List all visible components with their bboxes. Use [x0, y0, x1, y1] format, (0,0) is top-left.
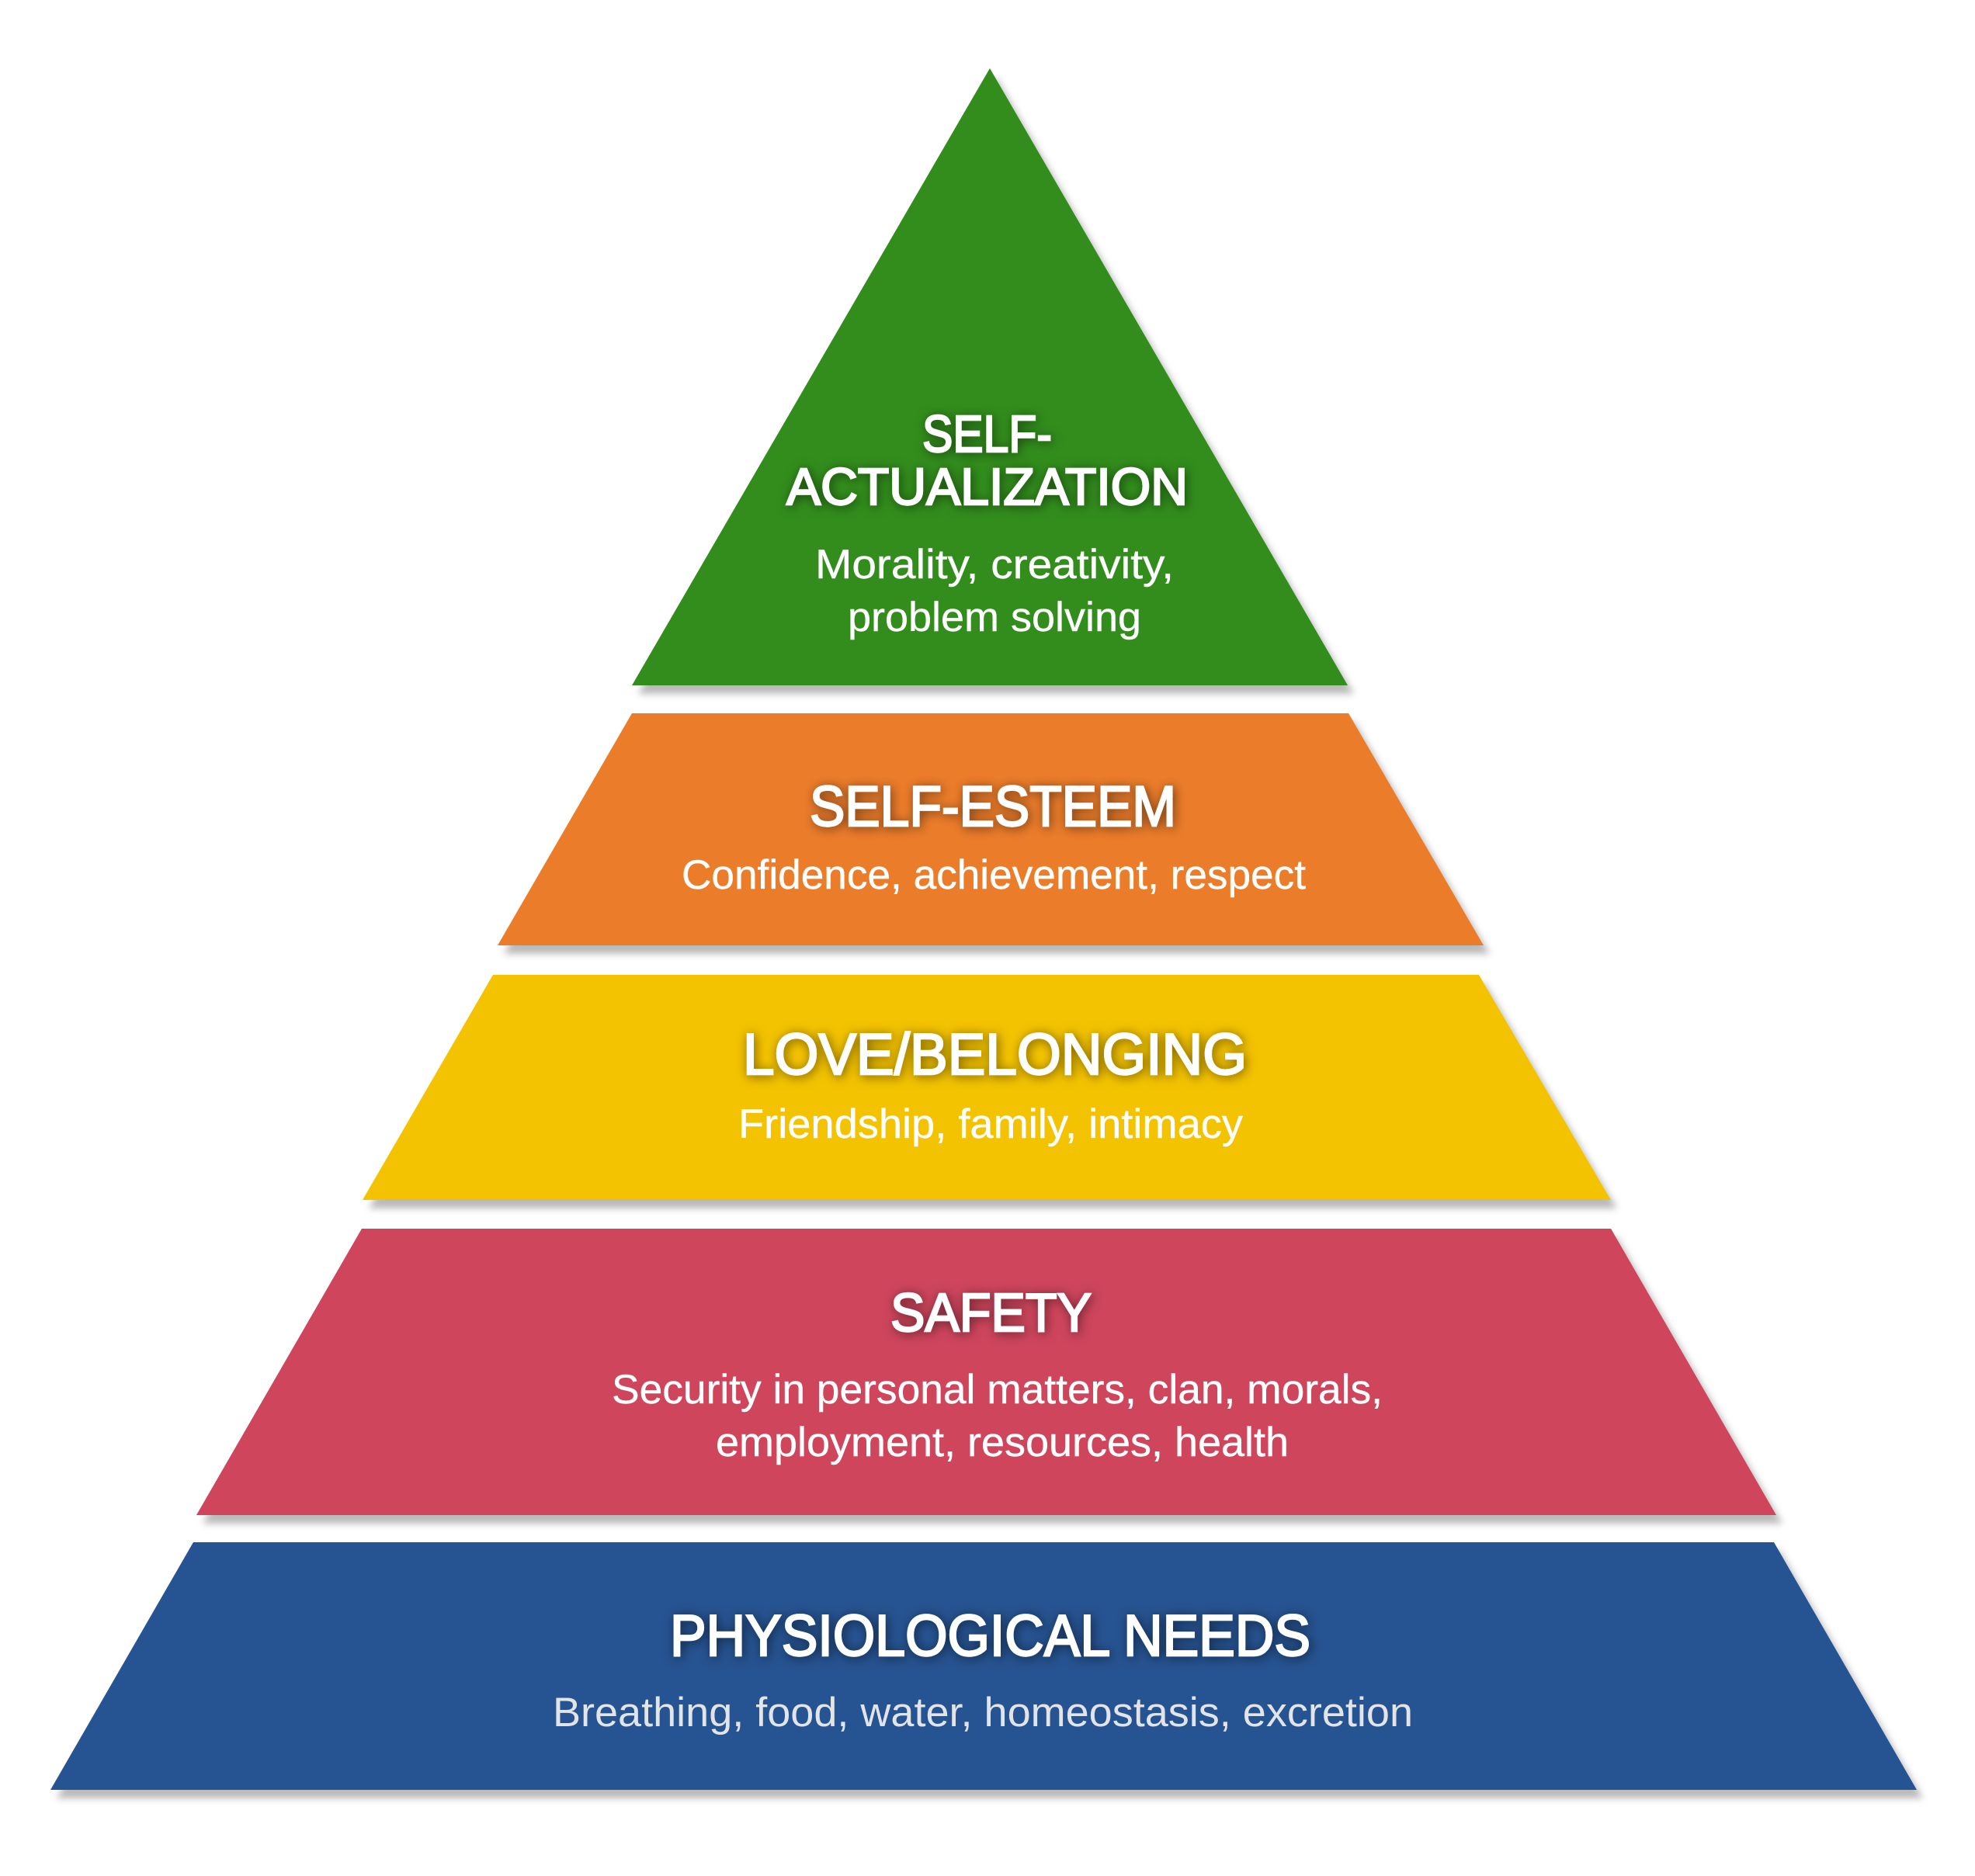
heading: physiological needs: PHYSIOLOGICAL NEEDS	[670, 1603, 1310, 1668]
heading: self-esteem: SELF-ESTEEM	[810, 775, 1176, 838]
heading: self-actualization	[786, 405, 1188, 516]
heading: safety: SAFETY	[890, 1282, 1092, 1343]
panel: self-actualization tier	[632, 68, 1348, 685]
heading: love/belonging: LOVE/BELONGING	[743, 1021, 1247, 1087]
description: safety: employment, resources, health	[716, 1420, 1289, 1465]
description: safety	[612, 1367, 1383, 1465]
heading: self-actualization: ACTUALIZATION	[786, 458, 1188, 516]
description: self-esteem: Confidence, achievement, respect	[682, 852, 1306, 898]
panel: physiological needs tier	[50, 1542, 1917, 1790]
description: safety: Security in personal matters, clan, morals,	[612, 1367, 1383, 1413]
shape: orange trapezoid	[498, 713, 1484, 945]
description: self-actualization	[815, 542, 1174, 640]
shape: green triangle	[632, 68, 1348, 685]
panel: love/belonging tier	[363, 975, 1611, 1200]
shape: yellow trapezoid	[363, 975, 1611, 1200]
panel: safety tier	[196, 1229, 1776, 1515]
heading: self-actualization: SELF-	[922, 405, 1052, 463]
shape: blue trapezoid	[50, 1542, 1917, 1790]
description: self-actualization: problem solving	[848, 595, 1141, 640]
description: self-actualization: Morality, creativity,	[815, 542, 1174, 588]
description: love/belonging: Friendship, family, intimacy	[738, 1101, 1244, 1147]
panel: self-esteem tier	[498, 713, 1484, 945]
shape: red trapezoid	[196, 1229, 1776, 1515]
description: physiological needs: Breathing, food, water, homeostasis, excretion	[553, 1690, 1413, 1736]
